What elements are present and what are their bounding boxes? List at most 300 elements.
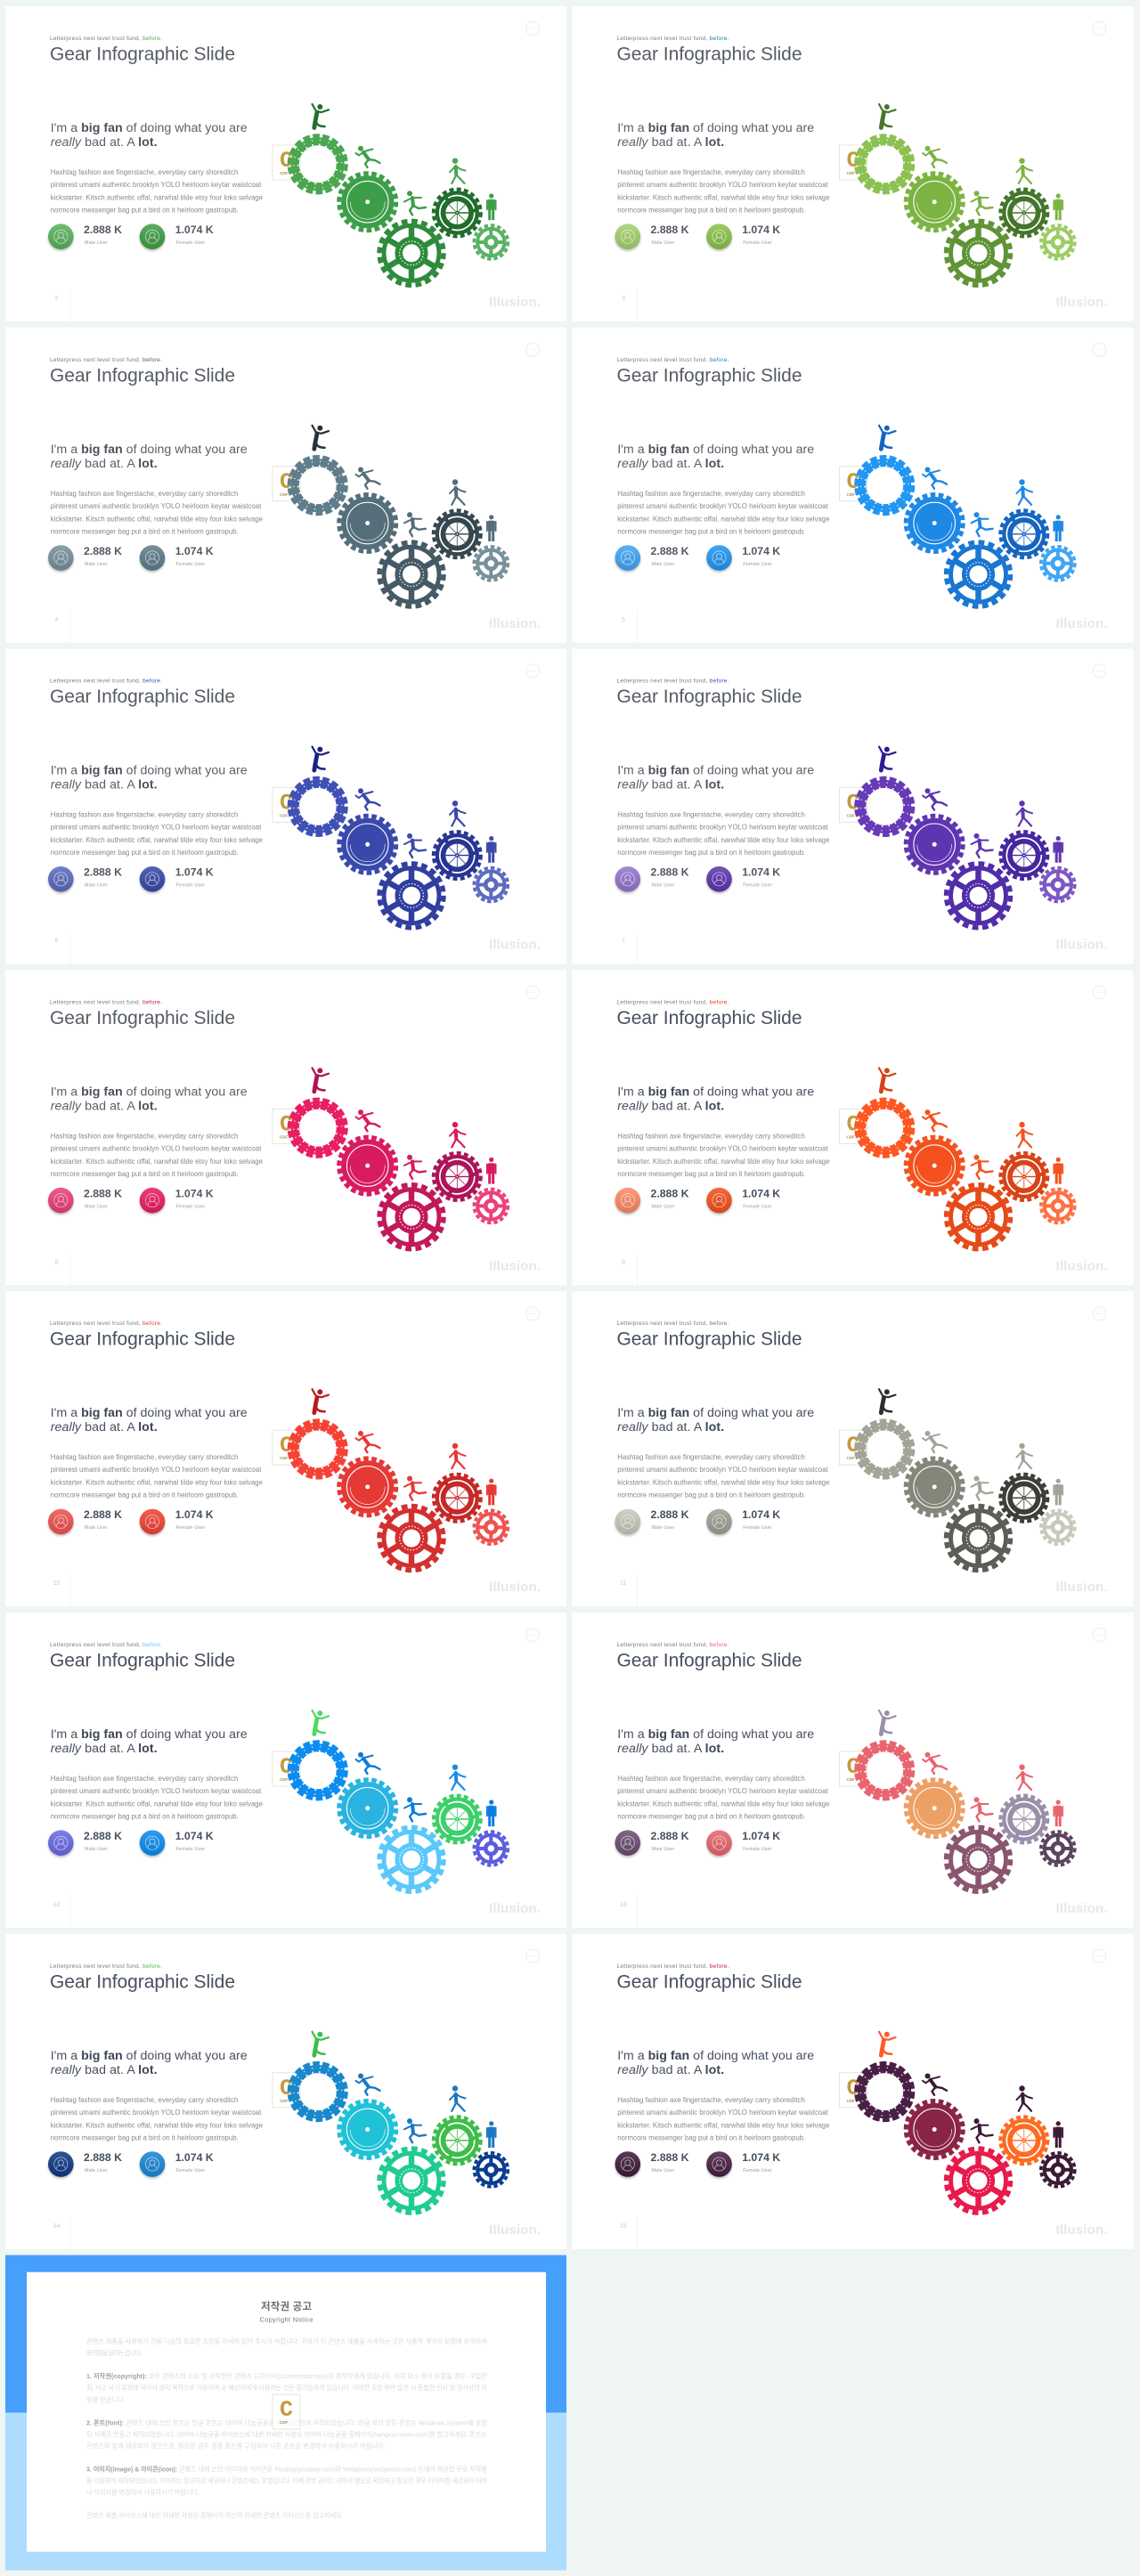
panel: slide 8 pink	[5, 970, 566, 1285]
gear 4 wheel	[1000, 189, 1047, 237]
panel: slide 12 bright multicolour	[5, 1613, 566, 1928]
stat: male users: 2.888 K	[650, 866, 689, 879]
watermark badge	[273, 788, 300, 823]
title: Gear Infographic Slide	[50, 365, 235, 386]
gear 2 disc	[339, 1780, 396, 1837]
body text: kickstarter. Kitsch authentic offal, narwhal tilde etsy four loko selvage	[617, 515, 830, 523]
stat: female users: 1.074 K	[742, 1187, 780, 1199]
page number: 13	[620, 1902, 627, 1908]
gear 1 ring	[289, 1742, 346, 1799]
heading: really bad at. A lot.	[617, 2063, 724, 2077]
stat: male users	[48, 223, 122, 251]
body text: pinterest umami authentic brooklyn YOLO heirloom keytar waistcoat	[51, 824, 262, 832]
watermark badge	[839, 1430, 867, 1465]
notice section 3: 나 이미지를 변경하여 사용하시기 바랍니다.	[86, 2488, 200, 2497]
stat: male users	[48, 1830, 122, 1857]
stat: male users: Male User	[85, 240, 108, 246]
body text	[617, 1775, 830, 1820]
stat: female users: Female User	[743, 1204, 772, 1209]
icon: menu dots	[525, 1307, 540, 1321]
eyebrow: Letterpress next level trust fund, before.	[616, 36, 729, 42]
body text: normcore messenger bag put a bird on it heirloom gastropub.	[51, 1491, 239, 1499]
stat: female users	[706, 545, 780, 573]
panel: slide 15 plum and crimson	[572, 1934, 1133, 2249]
gear 2 disc	[339, 816, 396, 873]
gear 1 ring	[289, 2063, 346, 2120]
gear 3 spoked	[379, 1827, 444, 1891]
body text: kickstarter. Kitsch authentic offal, narwhal tilde etsy four loko selvage	[617, 194, 830, 201]
figure sprinting	[404, 1155, 426, 1179]
figure standing	[1054, 1479, 1063, 1505]
figure walking	[1017, 2085, 1032, 2111]
body text	[51, 490, 263, 535]
heading: I'm a big fan of doing what you are	[617, 1727, 814, 1742]
figure sprinting	[971, 833, 992, 857]
icon: menu dots	[1093, 21, 1106, 36]
page number: 3	[622, 296, 625, 302]
stat: female users	[139, 1187, 214, 1215]
gear 3 spoked	[379, 221, 444, 285]
figure sprinting	[971, 1797, 992, 1822]
body text: pinterest umami authentic brooklyn YOLO heirloom keytar waistcoat	[617, 181, 829, 189]
body text: pinterest umami authentic brooklyn YOLO heirloom keytar waistcoat	[617, 824, 829, 832]
copyright heading korean: 저작권 공고	[261, 2300, 312, 2312]
body text: Hashtag fashion axe fingerstache, everyday carry shoreditch	[617, 168, 805, 176]
figure standing	[1054, 1800, 1063, 1826]
gear 3 spoked	[946, 2149, 1010, 2213]
watermark badge: C	[280, 2076, 293, 2101]
watermark badge: C	[846, 1433, 860, 1459]
gear 5 small	[474, 1832, 508, 1865]
gear 2 disc	[339, 495, 396, 552]
heading: I'm a big fan of doing what you are	[617, 764, 814, 778]
stat: male users: Male User	[652, 1525, 674, 1531]
gear 5 small	[474, 2153, 508, 2187]
gear 1 ring	[856, 1421, 913, 1477]
stat: male users	[615, 1187, 689, 1215]
brand: Illusion.	[489, 1258, 541, 1273]
gear 5 small	[1041, 2153, 1075, 2187]
watermark badge	[273, 467, 300, 501]
stat: female users: 1.074 K	[742, 1830, 780, 1842]
panel: slide 11 gray	[572, 1291, 1133, 1606]
body text: Hashtag fashion axe fingerstache, everyday carry shoreditch	[51, 2096, 238, 2104]
figure jumping	[312, 1068, 329, 1092]
figure sprinting	[404, 1476, 426, 1500]
gear 3 spoked	[379, 1507, 444, 1571]
body text: pinterest umami authentic brooklyn YOLO heirloom keytar waistcoat	[617, 502, 829, 510]
body text: Hashtag fashion axe fingerstache, everyday carry shoreditch	[51, 1132, 238, 1140]
stat: female users	[706, 2151, 780, 2179]
body text: kickstarter. Kitsch authentic offal, narwhal tilde etsy four loko selvage	[51, 836, 263, 844]
eyebrow: Letterpress next level trust fund, before.	[50, 679, 162, 685]
gear 4 wheel	[1000, 1153, 1047, 1200]
brand: Illusion.	[1056, 938, 1108, 953]
watermark badge: C	[280, 2397, 293, 2423]
heading: I'm a big fan of doing what you are	[51, 1085, 248, 1099]
figure sprinting	[404, 512, 426, 536]
body text: pinterest umami authentic brooklyn YOLO heirloom keytar waistcoat	[617, 1787, 829, 1795]
notice section 2	[86, 2418, 487, 2450]
body text: kickstarter. Kitsch authentic offal, narwhal tilde etsy four loko selvage	[51, 515, 263, 523]
gear 1 ring	[856, 135, 913, 192]
brand: Illusion.	[1056, 1258, 1108, 1273]
heading	[51, 2049, 248, 2077]
stat: male users: 2.888 K	[650, 1508, 689, 1521]
body text	[617, 1453, 830, 1499]
heading	[51, 1727, 248, 1756]
gear 4 wheel	[1000, 510, 1047, 557]
stat: female users: 1.074 K	[175, 1830, 214, 1842]
stat: male users: Male User	[652, 562, 674, 567]
gear 4 wheel	[434, 510, 481, 557]
body text: pinterest umami authentic brooklyn YOLO heirloom keytar waistcoat	[617, 2109, 829, 2117]
eyebrow: Letterpress next level trust fund, before.	[616, 1963, 729, 1970]
icon: menu dots	[1093, 986, 1106, 999]
watermark badge: C	[846, 1754, 860, 1780]
panel: slide 5 blue	[572, 328, 1133, 643]
gear 5 small	[1041, 1510, 1075, 1544]
heading: I'm a big fan of doing what you are	[51, 121, 248, 135]
panel: copyright notice	[5, 2255, 566, 2571]
stat: male users	[48, 1508, 122, 1536]
figure standing	[1054, 2121, 1063, 2148]
figure walking	[1017, 1443, 1032, 1468]
stat: female users: 1.074 K	[175, 223, 214, 236]
watermark badge	[273, 2073, 300, 2108]
heading	[617, 1085, 814, 1113]
gear 3 spoked	[946, 1827, 1010, 1891]
stat: female users	[139, 866, 214, 894]
gear 1 ring	[856, 457, 913, 514]
heading: I'm a big fan of doing what you are	[617, 121, 814, 135]
body text	[51, 1453, 263, 1499]
stat: male users	[615, 1508, 689, 1536]
stat: female users: 1.074 K	[175, 1187, 214, 1199]
stat: female users: 1.074 K	[742, 223, 780, 236]
watermark badge: CDF	[280, 2420, 288, 2425]
figure jumping	[879, 2032, 896, 2055]
body text	[617, 168, 830, 214]
stat: female users: 1.074 K	[175, 866, 214, 879]
body text: kickstarter. Kitsch authentic offal, narwhal tilde etsy four loko selvage	[617, 2121, 830, 2129]
gear 4 wheel	[1000, 832, 1047, 879]
body text: kickstarter. Kitsch authentic offal, narwhal tilde etsy four loko selvage	[617, 1800, 830, 1808]
stat: male users	[615, 223, 689, 251]
gear 1 ring	[289, 135, 346, 192]
heading: I'm a big fan of doing what you are	[51, 2049, 248, 2063]
figure jumping	[312, 104, 329, 128]
notice section 1: 벌을 받습니다.	[86, 2395, 126, 2404]
stat: male users	[48, 545, 122, 573]
heading: really bad at. A lot.	[617, 1099, 724, 1113]
figure jumping	[879, 747, 896, 770]
body text: pinterest umami authentic brooklyn YOLO heirloom keytar waistcoat	[617, 1466, 829, 1474]
title: Gear Infographic Slide	[50, 687, 235, 707]
watermark badge	[839, 467, 867, 501]
figure walking	[1017, 479, 1032, 505]
heading: I'm a big fan of doing what you are	[51, 764, 248, 778]
heading	[617, 443, 814, 471]
heading: really bad at. A lot.	[51, 1742, 158, 1756]
watermark badge: CDF	[280, 1456, 288, 1460]
watermark badge: CDF	[280, 2099, 288, 2103]
heading: really bad at. A lot.	[617, 1420, 724, 1434]
figure sprinting	[404, 1797, 426, 1822]
body text: Hashtag fashion axe fingerstache, everyday carry shoreditch	[617, 2096, 805, 2104]
gear 2 disc	[906, 1780, 963, 1837]
figure walking	[450, 479, 465, 505]
stat: female users: Female User	[176, 240, 205, 246]
notice section 1: 회, 비슷 사기 유형에 따라서 권리 목적으로 이용하여 수 배선자에게 이용하는 것은 불가능하게 있습니다. 이러한 조항 위반 발견 시 준법한 민사 및 형사상의 처	[86, 2384, 487, 2392]
eyebrow: Letterpress next level trust fund, before.	[50, 36, 162, 42]
figure jumping	[879, 1389, 896, 1413]
body text: normcore messenger bag put a bird on it heirloom gastropub.	[51, 849, 239, 857]
watermark badge	[839, 145, 867, 180]
figure jumping	[879, 1711, 896, 1735]
gear 4 wheel	[434, 189, 481, 237]
gear 4 wheel	[434, 1153, 481, 1200]
notice section 3	[86, 2465, 487, 2497]
stat: female users: Female User	[743, 1525, 772, 1531]
watermark badge: C	[280, 469, 293, 495]
gear 5 small	[1041, 547, 1075, 581]
heading	[51, 1085, 248, 1113]
heading: really bad at. A lot.	[617, 1742, 724, 1756]
heading	[51, 443, 248, 471]
stat: male users	[615, 2151, 689, 2179]
gear 3 spoked	[946, 1185, 1010, 1249]
page number: 7	[622, 939, 625, 945]
watermark badge: C	[846, 1111, 860, 1137]
notice section 3: 을 이용하여 제작되었습니다. 이미지는 참고자료 제공되나 콘텐츠에는 포함됩니다. 이에 관한 권리는 귀하가 별도로 확인하고 필요한 경우 이미지를 새로워야 하여	[86, 2477, 487, 2484]
body text: Hashtag fashion axe fingerstache, everyday carry shoreditch	[51, 1775, 238, 1783]
stat: male users: 2.888 K	[650, 1187, 689, 1199]
body text: Hashtag fashion axe fingerstache, everyday carry shoreditch	[617, 1775, 805, 1783]
figure jumping	[879, 1068, 896, 1092]
watermark badge	[839, 2073, 867, 2108]
gear chart	[289, 1711, 508, 1891]
gear 4 wheel	[1000, 1475, 1047, 1522]
gear 5 small	[474, 225, 508, 259]
title: Gear Infographic Slide	[616, 1329, 802, 1350]
brand: Illusion.	[489, 2223, 541, 2238]
figure standing	[1054, 836, 1063, 863]
gear 3 spoked	[379, 2149, 444, 2213]
figure running	[356, 1752, 379, 1774]
icon: menu dots	[525, 1628, 540, 1642]
figure sprinting	[971, 512, 992, 536]
stat: male users: Male User	[652, 883, 674, 889]
body text: normcore messenger bag put a bird on it heirloom gastropub.	[51, 1813, 239, 1820]
body text	[617, 2096, 830, 2141]
gear 5 small	[474, 868, 508, 902]
gear 2 disc	[906, 1137, 963, 1194]
body text: kickstarter. Kitsch authentic offal, narwhal tilde etsy four loko selvage	[617, 1479, 830, 1487]
figure jumping	[312, 1389, 329, 1413]
stat: male users: 2.888 K	[84, 1508, 122, 1521]
gear 5 small	[1041, 868, 1075, 902]
heading: I'm a big fan of doing what you are	[617, 2049, 814, 2063]
figure standing	[487, 1479, 496, 1505]
stat: female users: 1.074 K	[175, 1508, 214, 1521]
body text: normcore messenger bag put a bird on it heirloom gastropub.	[51, 2133, 239, 2141]
body text: kickstarter. Kitsch authentic offal, narwhal tilde etsy four loko selvage	[51, 1479, 263, 1487]
stat: male users: Male User	[85, 1525, 108, 1531]
stat: female users: 1.074 K	[742, 866, 780, 879]
stat: female users	[139, 1830, 214, 1857]
stat: female users: Female User	[176, 1525, 205, 1531]
stat: male users: 2.888 K	[650, 223, 689, 236]
figure standing	[487, 836, 496, 863]
stat: female users: Female User	[743, 1847, 772, 1852]
figure standing	[487, 2121, 496, 2148]
brand: Illusion.	[489, 295, 541, 310]
body text: normcore messenger bag put a bird on it heirloom gastropub.	[617, 2133, 805, 2141]
heading: really bad at. A lot.	[51, 2063, 158, 2077]
gear 4 wheel	[1000, 1795, 1047, 1843]
watermark badge	[273, 145, 300, 180]
gear chart	[289, 1068, 508, 1249]
body text: kickstarter. Kitsch authentic offal, narwhal tilde etsy four loko selvage	[51, 2121, 263, 2129]
heading: really bad at. A lot.	[617, 778, 724, 792]
page number: 15	[620, 2223, 627, 2230]
panel: slide 13 muted multicolour	[572, 1613, 1133, 1928]
body text: normcore messenger bag put a bird on it heirloom gastropub.	[617, 849, 805, 857]
watermark badge: C	[280, 148, 293, 174]
gear 5 small	[474, 1510, 508, 1544]
stat: female users	[706, 866, 780, 894]
figure sprinting	[404, 833, 426, 857]
gear 5 small	[474, 1189, 508, 1223]
notice section 2: 2. 폰트(font): 콘텐츠 내에 쓰인 폰트는 한글 폰트는 네이버 나눔글꼴로 제작되었으며 저작되었습니다. 한글 외의 모든 폰트는 Windows System에 포함	[86, 2418, 487, 2427]
stat: female users	[706, 1830, 780, 1857]
gear 4 wheel	[434, 2117, 481, 2164]
stat: female users: Female User	[743, 240, 772, 246]
figure running	[356, 788, 379, 810]
figure running	[356, 2073, 379, 2095]
body text: kickstarter. Kitsch authentic offal, narwhal tilde etsy four loko selvage	[51, 1800, 263, 1808]
heading: I'm a big fan of doing what you are	[51, 1406, 248, 1420]
gear 2 disc	[906, 1459, 963, 1516]
figure jumping	[312, 747, 329, 770]
heading	[51, 121, 248, 150]
eyebrow: Letterpress next level trust fund, before.	[50, 357, 162, 363]
gear chart	[289, 747, 508, 928]
icon: menu dots	[525, 343, 540, 356]
watermark badge: CDF	[280, 1134, 288, 1139]
figure walking	[1017, 800, 1032, 826]
icon: menu dots	[1093, 1307, 1106, 1321]
brand: Illusion.	[489, 1580, 541, 1595]
stat: female users	[139, 545, 214, 573]
figure standing	[487, 1800, 496, 1826]
stat: female users: 1.074 K	[742, 2151, 780, 2164]
body text: Hashtag fashion axe fingerstache, everyday carry shoreditch	[617, 811, 805, 819]
watermark badge: CDF	[280, 492, 288, 497]
panel: slide 7 purple	[572, 649, 1133, 964]
panel: slide 4 slate	[5, 328, 566, 643]
stat: male users: 2.888 K	[84, 223, 122, 236]
heading	[51, 1406, 248, 1434]
stat: male users: Male User	[85, 1204, 108, 1209]
figure walking	[450, 1765, 465, 1790]
brand: Illusion.	[489, 938, 541, 953]
stat: female users: 1.074 K	[175, 2151, 214, 2164]
stat: female users	[139, 1508, 214, 1536]
body text: Hashtag fashion axe fingerstache, everyday carry shoreditch	[617, 1453, 805, 1461]
icon: menu dots	[525, 1949, 540, 1962]
figure sprinting	[971, 2118, 992, 2142]
watermark badge: CDF	[846, 1134, 855, 1139]
figure walking	[1017, 158, 1032, 183]
page number: 4	[55, 617, 59, 623]
gear 2 disc	[339, 2101, 396, 2158]
body text	[51, 2096, 263, 2141]
figure running	[923, 1752, 947, 1774]
stat: male users	[48, 1187, 122, 1215]
title: Gear Infographic Slide	[616, 1651, 802, 1670]
gear chart	[289, 2032, 508, 2213]
icon: menu dots	[1093, 1628, 1106, 1642]
figure standing	[487, 1158, 496, 1184]
stat: male users: Male User	[652, 1847, 674, 1852]
stat: male users: 2.888 K	[84, 1830, 122, 1842]
gear 4 wheel	[434, 832, 481, 879]
figure sprinting	[404, 2118, 426, 2142]
notice intro: 콘텐츠 제품을 사용하기 전에 다음의 중요한 조항을 자세히 읽어 주시기 바랍니다. 귀하가 이 콘텐츠 제품을 사용하는 것은 사용자 계약과 보증에 동의하여	[86, 2337, 487, 2345]
watermark badge: C	[846, 469, 860, 495]
icon: menu dots	[525, 986, 540, 999]
stat: female users	[706, 1508, 780, 1536]
watermark badge: CDF	[280, 171, 288, 175]
stat: female users: Female User	[176, 562, 205, 567]
watermark badge: CDF	[846, 1777, 855, 1782]
gear 5 small	[1041, 1832, 1075, 1865]
title: Gear Infographic Slide	[616, 365, 802, 386]
body text	[51, 168, 263, 214]
stat: male users: Male User	[652, 2168, 674, 2174]
figure standing	[487, 193, 496, 220]
heading: I'm a big fan of doing what you are	[51, 1727, 248, 1742]
watermark badge: C	[280, 1111, 293, 1137]
stat: male users: 2.888 K	[650, 545, 689, 557]
body text: Hashtag fashion axe fingerstache, everyday carry shoreditch	[617, 490, 805, 498]
body text: kickstarter. Kitsch authentic offal, narwhal tilde etsy four loko selvage	[617, 836, 830, 844]
gear 2 disc	[906, 816, 963, 873]
body text: normcore messenger bag put a bird on it heirloom gastropub.	[617, 527, 805, 535]
icon: menu dots	[1093, 343, 1106, 356]
icon: menu dots	[525, 21, 540, 36]
heading	[617, 121, 814, 150]
stat: female users	[706, 1187, 780, 1215]
notice intro: 동의함을 알리는 겁니다.	[86, 2349, 142, 2357]
heading: I'm a big fan of doing what you are	[617, 1085, 814, 1099]
figure running	[356, 467, 379, 489]
page number: 10	[53, 1581, 60, 1587]
heading: really bad at. A lot.	[617, 135, 724, 150]
panel: slide 10 red	[5, 1291, 566, 1606]
panel: slide 14 teal multicolour	[5, 1934, 566, 2249]
copyright heading english: Copyright Notice	[260, 2315, 314, 2324]
stat: male users: 2.888 K	[84, 1187, 122, 1199]
stat: female users: Female User	[743, 562, 772, 567]
panel: slide 3 lime	[572, 6, 1133, 321]
page number: 5	[622, 617, 625, 623]
body text: Hashtag fashion axe fingerstache, everyday carry shoreditch	[51, 811, 238, 819]
stat: male users: Male User	[85, 562, 108, 567]
stat: male users: Male User	[652, 240, 674, 246]
